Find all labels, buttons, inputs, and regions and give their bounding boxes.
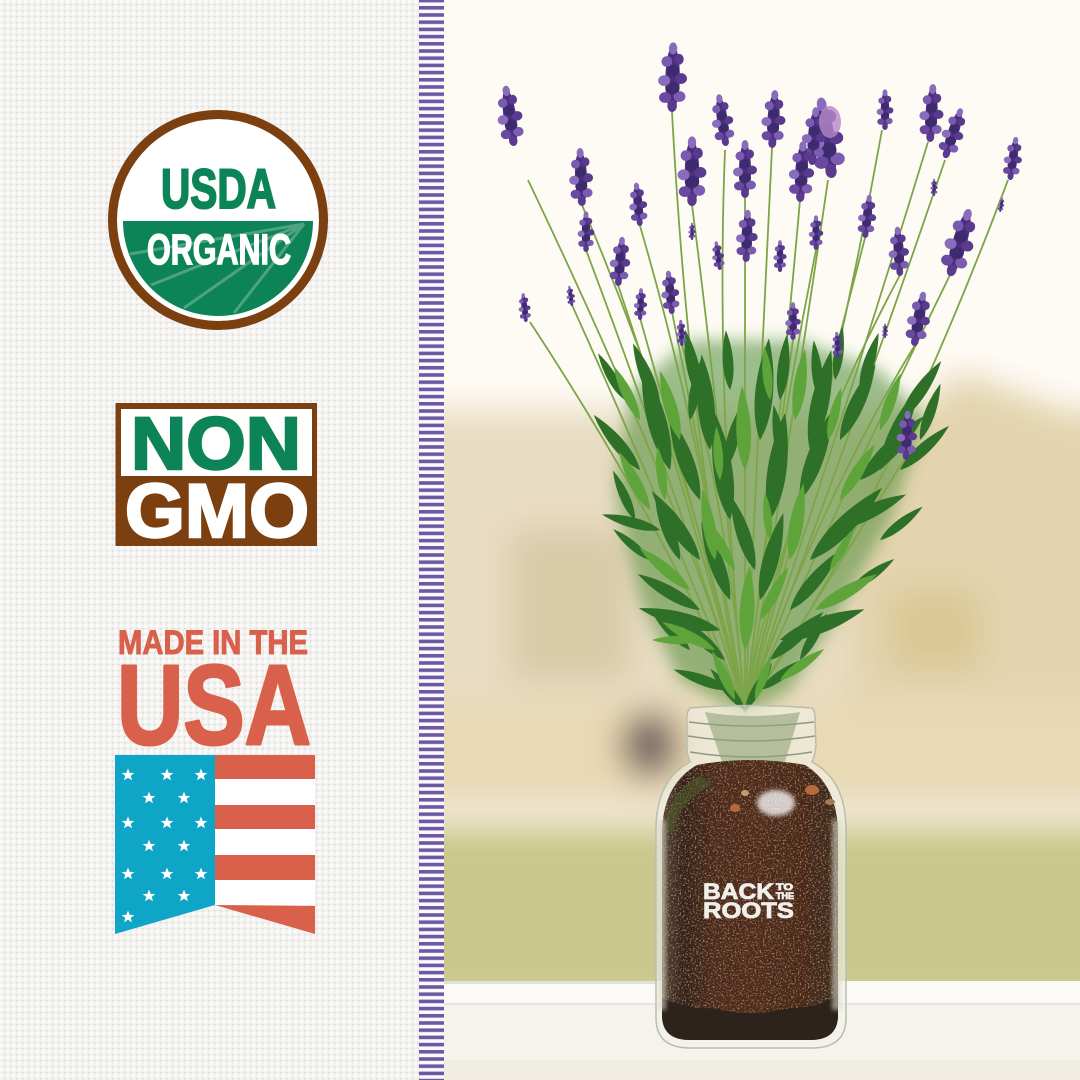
lavender flower spikes <box>493 42 1025 460</box>
GMO text: GMO <box>125 469 309 554</box>
Back to the Roots logo: BACK <box>703 879 774 904</box>
Made in the USA badge <box>115 624 315 934</box>
field rays <box>130 224 304 313</box>
NON text: NON <box>131 402 301 485</box>
light leaves <box>609 346 905 702</box>
badge ring <box>112 114 324 326</box>
Non GMO badge <box>116 402 317 554</box>
orange soil flecks <box>730 785 835 812</box>
Back to the Roots logo <box>703 879 794 923</box>
glass jar <box>656 706 846 1048</box>
green field <box>123 221 313 316</box>
window sill <box>444 981 1080 1080</box>
panel: blurred window background photo <box>400 0 1080 1005</box>
Back to the Roots logo: TO <box>776 882 793 892</box>
jar neck threads <box>688 722 815 757</box>
stems <box>528 112 1008 712</box>
striped purple divider <box>419 0 444 1080</box>
green tint at shoulder <box>665 775 712 835</box>
Back to the Roots logo: ROOTS <box>703 898 794 923</box>
panel: linen background <box>0 0 419 1080</box>
flag <box>115 755 315 934</box>
pink flower accent <box>819 106 841 138</box>
Back to the Roots logo: THE <box>776 891 794 901</box>
lavender plant <box>493 42 1025 715</box>
ORGANIC text: ORGANIC <box>147 226 291 274</box>
foliage mass <box>615 340 925 715</box>
glass highlight <box>757 790 795 816</box>
soil <box>662 760 838 1040</box>
jar glass <box>656 706 846 1048</box>
USDA text: USDA <box>161 157 276 220</box>
dark base soil <box>662 994 838 1040</box>
USA text: USA <box>117 642 311 768</box>
made in the text: MADE IN THE <box>118 624 308 662</box>
USDA Organic badge <box>112 114 324 326</box>
plant stems in neck <box>705 712 800 762</box>
jar side reflections <box>658 820 666 1010</box>
badge frame <box>116 403 317 546</box>
dark leaves <box>589 326 953 713</box>
